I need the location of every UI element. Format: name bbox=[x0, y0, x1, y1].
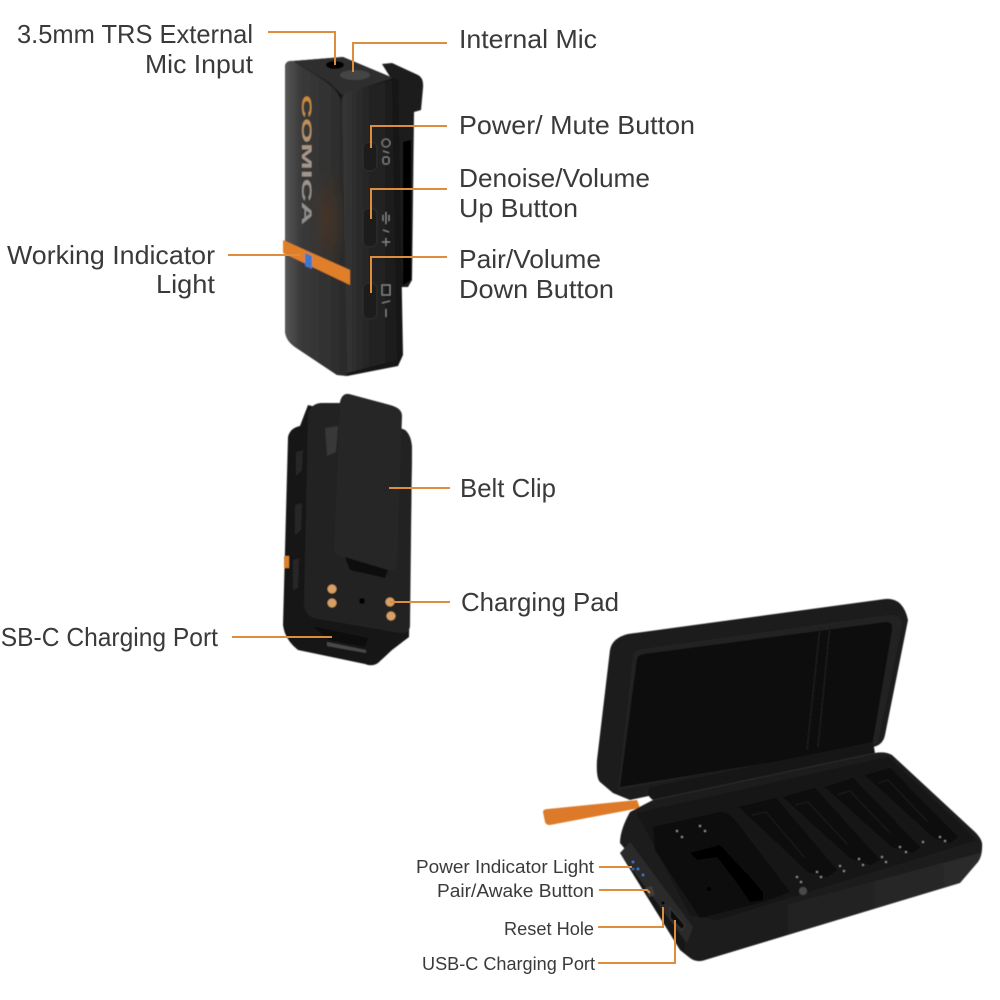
leader line bbox=[371, 189, 447, 219]
label text: Reset Hole bbox=[504, 919, 594, 939]
leader line bbox=[371, 257, 447, 293]
base lower shell bbox=[620, 843, 982, 961]
rear plate bbox=[304, 403, 412, 633]
COMICA logo: COMICA bbox=[299, 95, 315, 225]
label text: Pair/Volume bbox=[459, 244, 601, 274]
transmitter front view bbox=[283, 57, 423, 376]
case lid outer shell bbox=[597, 599, 908, 800]
label text: Belt Clip bbox=[460, 473, 556, 503]
callout: Pair/Awake Button bbox=[437, 881, 650, 901]
clip foot bbox=[345, 557, 388, 578]
label text: Pair/Awake Button bbox=[437, 881, 594, 901]
top face bbox=[293, 57, 393, 95]
orange band with blue indicator bbox=[283, 240, 350, 285]
side face bbox=[342, 80, 397, 373]
label text: Charging Pad bbox=[461, 587, 619, 617]
lid rim bbox=[618, 615, 902, 790]
orange strap bbox=[543, 800, 640, 825]
charging case bbox=[543, 599, 982, 961]
reset hole bbox=[662, 902, 664, 904]
power button bbox=[363, 142, 377, 171]
outer rail bbox=[283, 405, 412, 665]
charging pins bbox=[676, 825, 946, 883]
large transmitter bay bbox=[653, 812, 790, 918]
transmitter slot 2 bbox=[783, 788, 880, 865]
callout: Reset Hole bbox=[504, 907, 663, 939]
leader line bbox=[232, 636, 332, 638]
power indicator lights bbox=[632, 861, 644, 876]
USB-C port bbox=[670, 908, 685, 930]
belt clip behind the body bbox=[382, 63, 423, 287]
transmitter slot 4 bbox=[865, 768, 958, 843]
leader line bbox=[228, 254, 300, 256]
label text: Mic Input bbox=[145, 49, 254, 79]
clip pivot bbox=[325, 426, 338, 456]
label text: Light bbox=[156, 269, 216, 299]
leader line bbox=[599, 866, 632, 868]
orange band edge bbox=[284, 556, 289, 568]
callout: USB-C Charging Port on case bbox=[422, 920, 675, 974]
device silhouette bbox=[285, 57, 403, 376]
tray surface bbox=[637, 757, 977, 920]
charging pads bbox=[328, 584, 396, 620]
lid interior bbox=[620, 622, 892, 787]
tray indicator dot bbox=[799, 887, 807, 895]
leader line bbox=[371, 126, 447, 148]
belt clip bbox=[334, 394, 402, 570]
transmitter slot 3 bbox=[825, 778, 920, 853]
denoise button bbox=[363, 208, 377, 247]
side button bumps bbox=[293, 450, 303, 590]
label text: USB-C Charging Port bbox=[422, 954, 595, 974]
leader line bbox=[390, 601, 450, 603]
label text: Power Indicator Light bbox=[416, 857, 594, 877]
lid seam bbox=[807, 625, 830, 750]
bay hole bbox=[707, 887, 711, 891]
label text: Power/ Mute Button bbox=[459, 110, 695, 140]
label text: Working Indicator bbox=[7, 240, 215, 270]
internal mic recess bbox=[340, 70, 370, 80]
leader line bbox=[598, 920, 675, 963]
transmitter rear view bbox=[283, 394, 412, 665]
denoise and plus glyphs bbox=[382, 212, 390, 246]
power and mute glyphs bbox=[382, 139, 390, 164]
front face bbox=[285, 61, 347, 375]
L-shaped cutout bbox=[690, 845, 763, 902]
base top rim bbox=[620, 752, 982, 930]
pair and minus glyphs bbox=[382, 285, 390, 317]
callout: Power/ Mute Button bbox=[371, 110, 695, 148]
3.5mm jack hole bbox=[326, 61, 344, 69]
callout: Internal Mic bbox=[353, 24, 597, 72]
centre pin hole bbox=[359, 598, 365, 604]
hinge bbox=[648, 742, 875, 800]
leader line bbox=[599, 890, 650, 893]
pair button bbox=[363, 283, 377, 319]
left end panel bbox=[620, 842, 693, 943]
USB-C port bbox=[312, 626, 368, 653]
callout: Working Indicator Light bbox=[7, 240, 300, 299]
label text: Internal Mic bbox=[459, 24, 597, 54]
pair button bbox=[645, 886, 655, 897]
label text: Denoise/Volume bbox=[459, 163, 650, 193]
leader line bbox=[598, 907, 663, 927]
leader line bbox=[268, 32, 335, 65]
leader line bbox=[353, 43, 447, 72]
label text: 3.5mm TRS External bbox=[17, 19, 253, 49]
callout: 3.5mm TRS External Mic Input bbox=[17, 19, 335, 79]
callout: Pair/Volume Down Button bbox=[371, 244, 614, 304]
callout: Denoise/Volume Up Button bbox=[371, 163, 650, 223]
warm glow on front face bbox=[310, 165, 346, 275]
clip slot bbox=[403, 140, 411, 285]
label text: Up Button bbox=[459, 193, 578, 223]
transmitter slot 1 bbox=[739, 798, 837, 877]
label text: Down Button bbox=[459, 274, 614, 304]
leader line bbox=[389, 487, 450, 489]
